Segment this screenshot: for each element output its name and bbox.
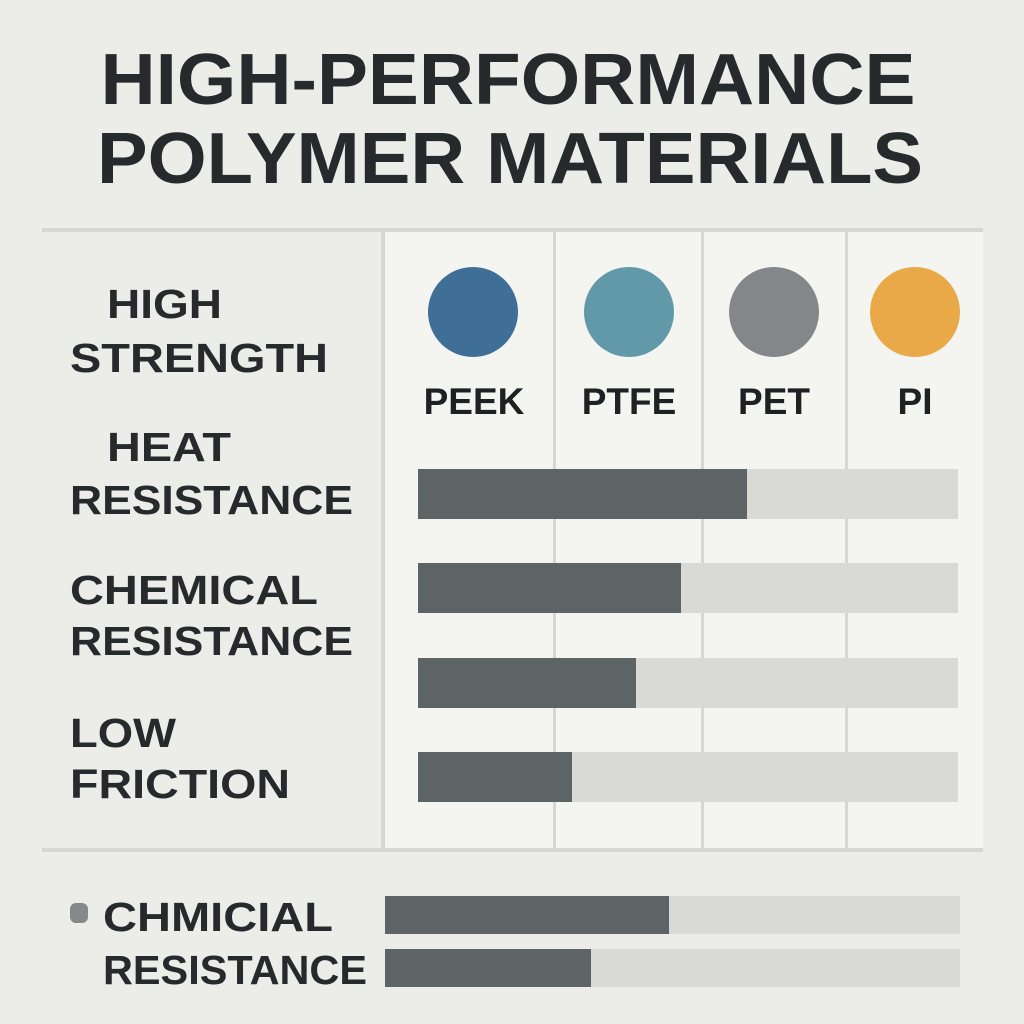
row labels (70, 281, 353, 807)
bottom label: CHMICIAL (103, 894, 333, 940)
bottom label: RESISTANCE (103, 947, 367, 993)
row labels: HEAT (107, 424, 231, 470)
row labels: RESISTANCE (70, 618, 353, 664)
column labels: PET (738, 381, 810, 422)
column labels (424, 381, 932, 422)
title: POLYMER MATERIALS (97, 119, 923, 199)
title: HIGH-PERFORMANCE (100, 40, 916, 120)
bottom bar chart (385, 896, 960, 987)
row labels: FRICTION (70, 761, 290, 807)
row labels: LOW (70, 710, 176, 756)
icon: PET circle (729, 267, 819, 357)
legend bullet (70, 903, 88, 923)
icon: PI circle (870, 267, 960, 357)
row labels: STRENGTH (70, 335, 328, 381)
column labels: PI (898, 381, 932, 422)
column labels: PTFE (582, 381, 676, 422)
bottom label (103, 894, 367, 993)
icon: PEEK circle (428, 267, 518, 357)
title (97, 40, 923, 199)
panel: comparison grid (381, 232, 983, 848)
icon: PTFE circle (584, 267, 674, 357)
row labels: CHEMICAL (70, 567, 318, 613)
bar chart (418, 469, 958, 802)
row labels: HIGH (107, 281, 222, 327)
row labels: RESISTANCE (70, 477, 353, 523)
column labels: PEEK (424, 381, 525, 422)
